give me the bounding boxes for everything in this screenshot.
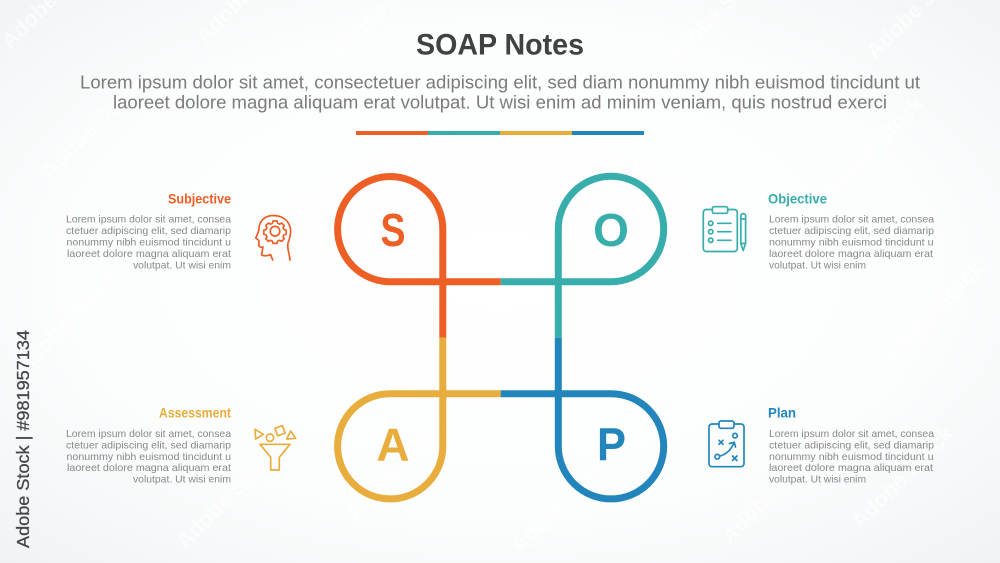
text block: Subjective: laoreet dolore magna aliquam erat [67, 249, 231, 260]
watermark pattern: Adobe Stock [211, 240, 324, 354]
text block: Assessment: nonummy nibh euismod tincidunt u [66, 452, 231, 463]
icon: clipboard with play diagram [709, 421, 744, 467]
text block: Objective: nonummy nibh euismod tincidunt u [769, 238, 934, 248]
icon: head with gear [256, 216, 291, 260]
loop: P: P [597, 418, 626, 470]
text block: Assessment: volutpat. Ut wisi enim [133, 474, 231, 486]
text block: Assessment: laoreet dolore magna aliquam erat [67, 463, 231, 474]
text block: Objective: Lorem ipsum dolor sit amet, consea [769, 214, 934, 226]
watermark pattern: Adobe Stock [506, 445, 619, 559]
text block: Objective: volutpat. Ut wisi enim [769, 260, 866, 272]
text block: Assessment: ctetuer adipiscing elit, sed diamarip [66, 440, 231, 452]
watermark pattern: Adobe Stock [876, 255, 989, 369]
text block: Subjective [66, 214, 231, 272]
text block: Assessment [66, 429, 231, 486]
watermark pattern: Adobe Stock [171, 440, 284, 554]
heading: Plan: Plan [768, 405, 796, 421]
intro text: Lorem ipsum dolor sit amet, consectetuer adipiscing elit, sed diam nonummy nibh euismod tincidunt ut [80, 72, 920, 92]
heading: Subjective: Subjective [168, 190, 231, 206]
watermark pattern: Adobe Stock [846, 420, 959, 534]
loop: P [501, 338, 664, 499]
watermark pattern: Adobe Stock [371, 85, 484, 199]
text block: Plan: laoreet dolore magna aliquam erat [769, 463, 933, 474]
heading: Objective: Objective [768, 190, 827, 206]
panel: Subjective [66, 190, 291, 272]
watermark pattern: Adobe Stock [496, 120, 609, 234]
loop: O: O [593, 204, 629, 256]
text block: Objective [769, 214, 934, 272]
text block: Subjective: ctetuer adipiscing elit, sed diamarip [66, 226, 231, 237]
text block: Subjective: nonummy nibh euismod tincidunt u [66, 238, 231, 248]
loop: A [338, 338, 501, 499]
text block: Subjective: Lorem ipsum dolor sit amet, consea [66, 214, 231, 226]
loop: A: A [376, 418, 410, 470]
icon: clipboard checklist with pencil [703, 207, 746, 252]
watermark pattern: Adobe Stock [341, 410, 454, 524]
panel: Objective [703, 190, 934, 272]
icon: funnel with shapes [255, 426, 296, 470]
panel: Plan [709, 405, 934, 486]
stock credit: Adobe Stock | #981957134 [13, 330, 33, 548]
colour divider bar [356, 131, 644, 135]
intro text: laoreet dolore magna aliquam erat volutpat. Ut wisi enim ad minim veniam, quis nostrud exerci [113, 92, 887, 112]
text block: Subjective: volutpat. Ut wisi enim [133, 260, 231, 272]
panel: Assessment [66, 405, 296, 486]
SOAP quatrefoil diagram [338, 176, 664, 499]
text block: Plan: volutpat. Ut wisi enim [769, 474, 866, 486]
text block: Plan: ctetuer adipiscing elit, sed diamarip [769, 440, 934, 452]
loop: O [501, 176, 664, 338]
watermark pattern: Adobe Stock [36, 70, 149, 184]
title: SOAP Notes [416, 28, 584, 62]
loop: S: S [380, 204, 406, 256]
text block: Objective: laoreet dolore magna aliquam erat [769, 249, 933, 260]
text block: Plan: Lorem ipsum dolor sit amet, consea [769, 429, 934, 440]
text block: Assessment: Lorem ipsum dolor sit amet, consea [66, 429, 231, 440]
text block: Plan: nonummy nibh euismod tincidunt u [769, 452, 934, 463]
heading: Assessment: Assessment [159, 405, 231, 421]
watermark pattern: Adobe Stock [716, 435, 829, 549]
text block: Plan [769, 429, 934, 486]
text block: Objective: ctetuer adipiscing elit, sed diamarip [769, 226, 934, 237]
intro text [80, 72, 920, 112]
watermark pattern: Adobe Stock [816, 90, 929, 204]
watermark pattern: Adobe Stock [11, 265, 124, 379]
watermark pattern: Adobe Stock [666, 275, 779, 389]
loop: S [338, 176, 501, 338]
